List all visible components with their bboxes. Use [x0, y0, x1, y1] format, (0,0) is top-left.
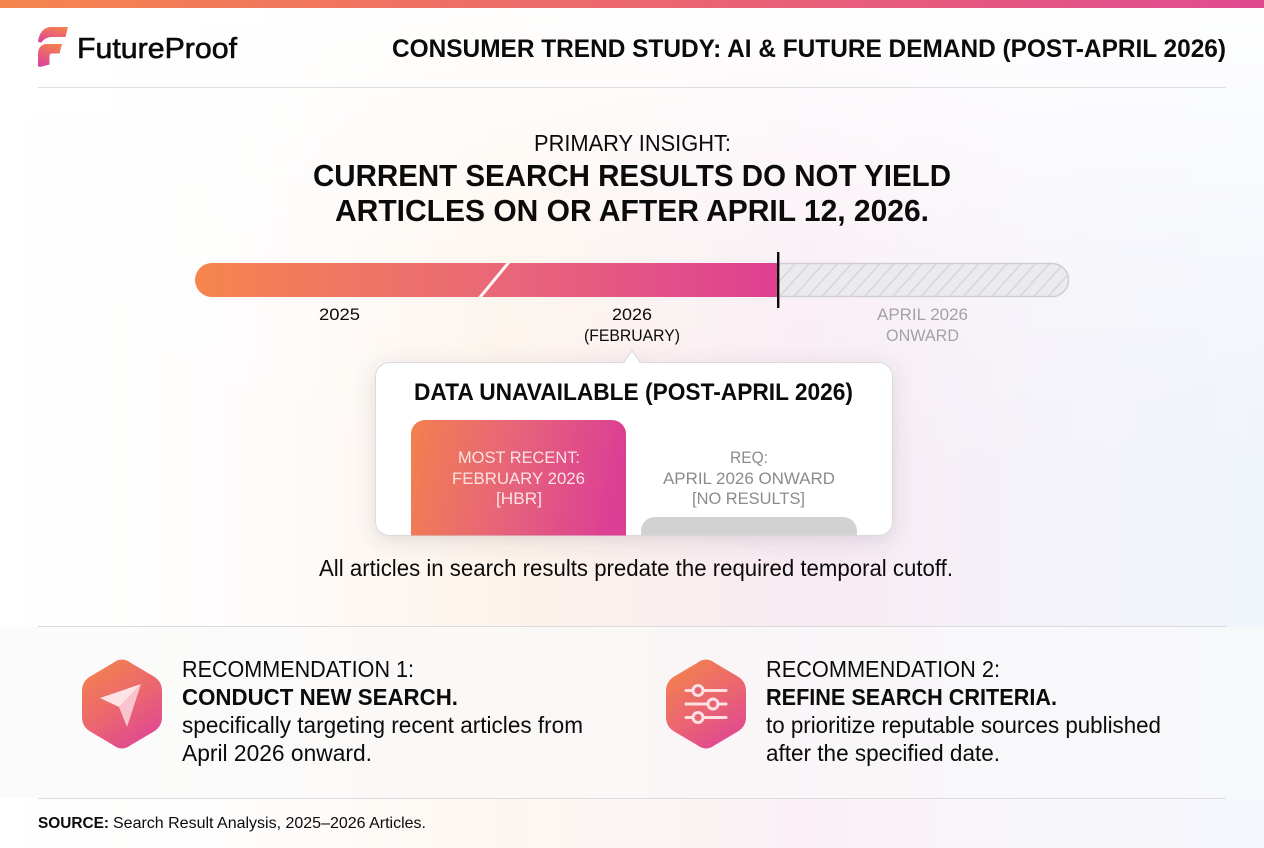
- panel: most recent: MOST RECENT:: [458, 449, 580, 467]
- recommendation 1 text: specifically targeting recent articles from: [182, 712, 583, 738]
- wordmark: FutureProof: [77, 33, 238, 65]
- recommendation 1: [82, 656, 583, 766]
- recommendation 2 text: REFINE SEARCH CRITERIA.: [766, 684, 1057, 710]
- icon: sliders in hexagon: [666, 660, 746, 748]
- logo: FutureProof: [38, 27, 238, 67]
- card heading: DATA UNAVAILABLE (POST-APRIL 2026): [414, 379, 853, 406]
- panel: required: [NO RESULTS]: [692, 490, 805, 508]
- panel: most recent: [HBR]: [496, 490, 542, 508]
- timeline label: April 2026 onward: [877, 305, 968, 345]
- card body with pointer: [376, 350, 892, 536]
- source note: Search Result Analysis, 2025–2026 Articles.: [113, 815, 426, 832]
- caption: All articles in search results predate the required temporal cutoff.: [319, 555, 953, 581]
- timeline label: 2026 February: 2026: [612, 305, 652, 324]
- icon: F logo mark: [38, 27, 68, 67]
- recommendation 2 text: to prioritize reputable sources published: [766, 712, 1161, 738]
- top gradient bar: [0, 0, 1264, 8]
- timeline: available gradient segment: [195, 263, 778, 297]
- timeline label: April 2026 onward: APRIL 2026: [877, 305, 968, 324]
- panel: required: [641, 449, 857, 536]
- recommendation 1 text: CONDUCT NEW SEARCH.: [182, 684, 458, 710]
- callout card: data unavailable: [376, 350, 892, 536]
- primary insight heading: ARTICLES ON OR AFTER APRIL 12, 2026.: [335, 193, 929, 228]
- primary insight heading: CURRENT SEARCH RESULTS DO NOT YIELD: [313, 158, 951, 193]
- timeline label: April 2026 onward: ONWARD: [886, 326, 959, 345]
- panel: required: REQ:: [730, 449, 768, 467]
- primary insight heading: [313, 130, 951, 228]
- primary insight heading: PRIMARY INSIGHT:: [534, 130, 731, 156]
- recommendation 2 text: RECOMMENDATION 2:: [766, 656, 1000, 682]
- timeline: unavailable hatched segment: [778, 264, 1068, 296]
- recommendation 2 text: after the specified date.: [766, 740, 1000, 766]
- source note: SOURCE:: [38, 815, 109, 832]
- report title: CONSUMER TREND STUDY: AI & FUTURE DEMAND (POST-APRIL 2026): [392, 35, 1226, 63]
- timeline: [195, 252, 1068, 345]
- recommendation 1 text: RECOMMENDATION 1:: [182, 656, 414, 682]
- timeline label: 2026 February: [584, 305, 680, 345]
- panel: most recent: FEBRUARY 2026: [452, 470, 585, 488]
- recommendation 2: [666, 656, 1161, 766]
- timeline label: 2026 February: (FEBRUARY): [584, 327, 680, 345]
- icon: paper plane in hexagon: [82, 660, 162, 748]
- timeline label: 2025: 2025: [319, 305, 360, 324]
- panel: required: APRIL 2026 ONWARD: [663, 470, 835, 488]
- recommendation 1 text: April 2026 onward.: [182, 740, 372, 766]
- recommendation 2 text: [766, 656, 1161, 766]
- recommendation 1 text: [182, 656, 583, 766]
- timeline: cutoff marker: [777, 252, 779, 308]
- panel: most recent: [411, 420, 626, 536]
